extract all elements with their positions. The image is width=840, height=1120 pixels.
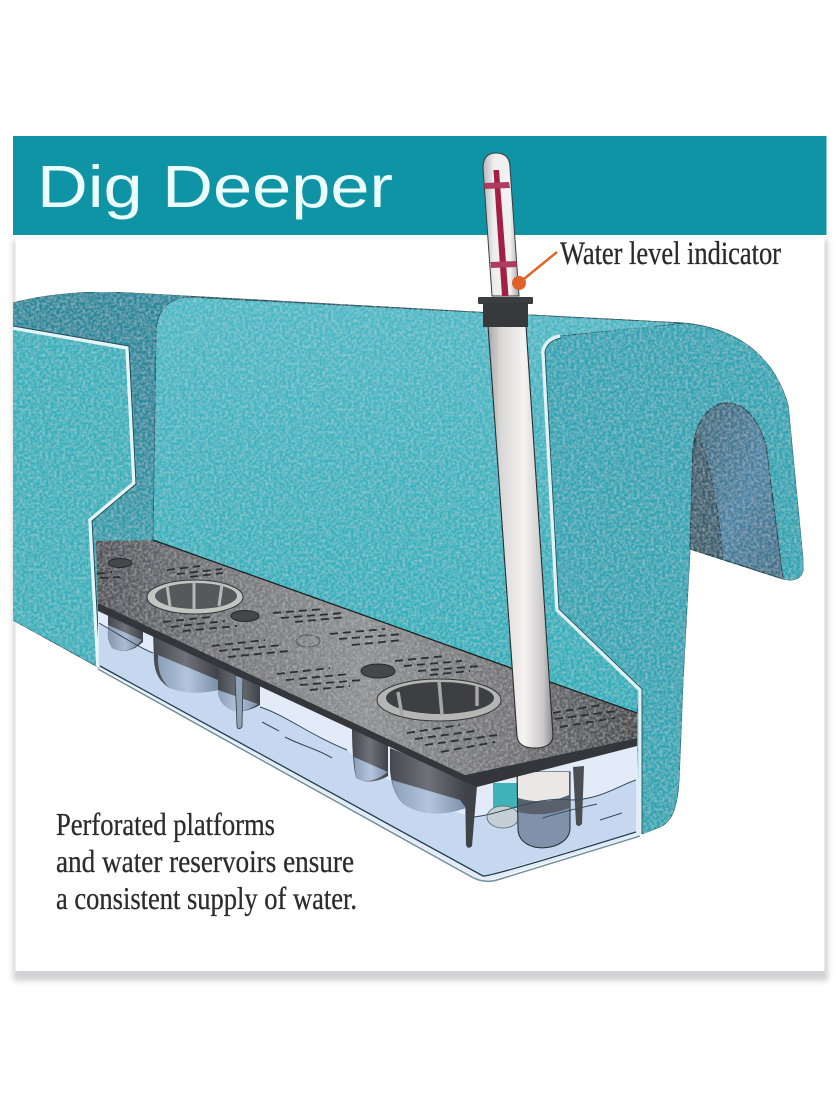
- ring opening left: [147, 580, 243, 614]
- leg: [235, 675, 243, 729]
- cup 4: [352, 728, 388, 782]
- platform holes: [108, 558, 395, 678]
- illustration: planter cross-section: [13, 153, 803, 882]
- back wall: [153, 297, 683, 713]
- callout label: Water level indicator: [560, 236, 781, 272]
- pipe base cup: [517, 772, 570, 848]
- cup 1 water: [108, 625, 142, 651]
- float disc: [487, 806, 519, 828]
- caption: Perforated platforms: [56, 806, 275, 842]
- reservoir outer wall: [98, 669, 640, 881]
- ring ribs: [398, 681, 477, 716]
- cup 2: [153, 632, 218, 693]
- sensor mark: [296, 635, 320, 647]
- right cut edge shadow line: [545, 338, 642, 834]
- collar: [483, 303, 528, 327]
- handle notch: [690, 403, 783, 579]
- water body: [99, 623, 636, 876]
- planter body: [13, 292, 803, 834]
- cup 4 water: [354, 757, 388, 781]
- left cups: [108, 605, 260, 729]
- indicator rod: [494, 170, 508, 296]
- rear leg: [573, 766, 584, 826]
- reservoir: [98, 605, 640, 882]
- cup 5: [390, 748, 466, 813]
- planter silhouette: [13, 292, 803, 834]
- reservoir outline: [100, 666, 636, 876]
- leader dot: [512, 276, 526, 290]
- front leg: [465, 782, 477, 848]
- caption: [56, 806, 357, 916]
- left front panel: [13, 329, 134, 666]
- white card: [16, 235, 824, 971]
- caption: a consistent supply of water.: [56, 880, 357, 916]
- handle notch inner shade: [690, 432, 723, 558]
- pipe base dark band: [518, 795, 569, 814]
- cup 1: [108, 605, 143, 651]
- platform outline: [153, 540, 637, 713]
- callout: water level indicator: [512, 236, 781, 290]
- water ripples: [99, 623, 636, 820]
- ring opening right: [377, 679, 501, 721]
- ring well: [155, 583, 237, 609]
- left cut edge: [13, 328, 134, 667]
- right front panel: [558, 324, 803, 834]
- teal float: [493, 783, 517, 808]
- reservoir glass: [98, 606, 640, 882]
- right cups: [352, 728, 584, 848]
- card shadow: [13, 240, 828, 981]
- ring ribs: [167, 581, 222, 610]
- collar flange: [478, 297, 533, 304]
- ring well: [386, 682, 494, 714]
- pipe base upper: [518, 772, 569, 801]
- platform top: [96, 540, 637, 775]
- indicator upper band: [484, 182, 510, 189]
- title: Dig Deeper: [37, 154, 393, 220]
- right cut edge: [543, 336, 640, 834]
- leader line: [519, 252, 557, 283]
- perforation slots: [97, 566, 617, 752]
- left cut edge shadow line: [13, 326, 136, 667]
- inner corner shadow: [13, 292, 185, 545]
- cup 2 water: [158, 655, 218, 693]
- title banner: [13, 136, 826, 235]
- platform edge: [98, 603, 637, 787]
- perforated platform: [96, 540, 637, 787]
- pipe: [488, 325, 553, 748]
- water level indicator assembly: [478, 153, 553, 748]
- cup 5 water: [392, 780, 466, 813]
- cup 3 water: [218, 690, 258, 711]
- cup 3: [218, 664, 260, 711]
- indicator lower band: [490, 261, 517, 268]
- caption: and water reservoirs ensure: [56, 843, 354, 879]
- ring rim: [147, 580, 243, 614]
- ring rim: [377, 679, 501, 721]
- indicator stem: [483, 153, 519, 296]
